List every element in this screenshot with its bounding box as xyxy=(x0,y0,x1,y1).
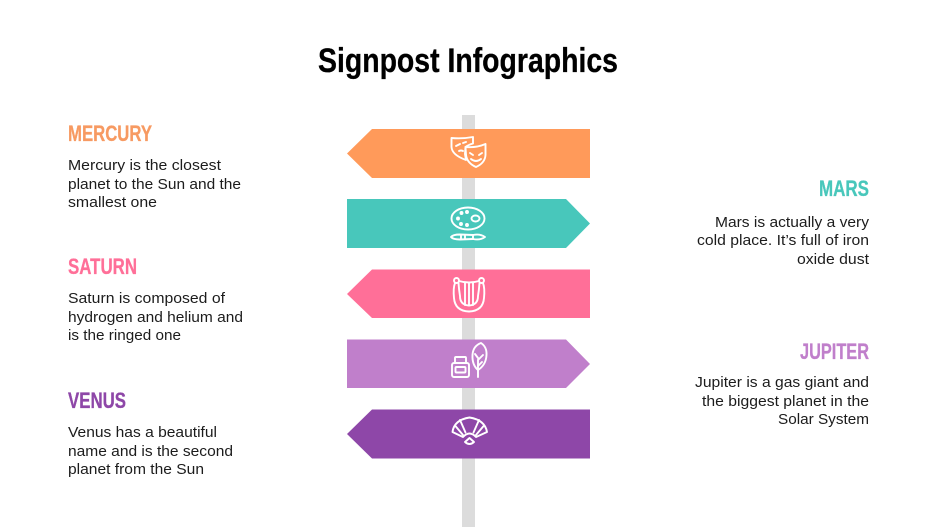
text block: Venus: name and is the second xyxy=(68,443,233,460)
text block: Jupiter: Jupiter is a gas giant and xyxy=(695,374,869,391)
icon: theatre masks xyxy=(452,137,486,167)
panel: Jupiter xyxy=(695,339,869,428)
text block: Mars xyxy=(697,214,870,268)
text block: Mars: oxide dust xyxy=(797,251,870,268)
signpost pole xyxy=(462,115,475,527)
title: Signpost Infographics xyxy=(318,42,618,80)
text block: Mercury: smallest one xyxy=(68,194,157,211)
text block: Jupiter: Solar System xyxy=(778,411,869,428)
text block: Venus: Venus has a beautiful xyxy=(68,424,217,441)
text block: Mars: cold place. It’s full of iron xyxy=(697,232,869,249)
heading: Saturn: SATURN xyxy=(68,254,137,279)
arrow: light purple, pointing right xyxy=(347,340,590,388)
heading: Jupiter: JUPITER xyxy=(800,339,869,364)
icon: lyre xyxy=(454,278,484,312)
heading: Venus: VENUS xyxy=(68,388,126,413)
heading: Mars: MARS xyxy=(819,176,869,201)
text block: Saturn: hydrogen and helium and xyxy=(68,309,243,326)
text block: Saturn: Saturn is composed of xyxy=(68,290,226,307)
text block: Saturn xyxy=(68,290,243,344)
text block: Mercury xyxy=(68,157,241,211)
text block: Jupiter xyxy=(695,374,869,428)
text block: Saturn: is the ringed one xyxy=(68,327,181,344)
arrow: pink, pointing left xyxy=(347,270,590,318)
arrow: orange, pointing left xyxy=(347,129,590,178)
icon: paint palette and brush xyxy=(451,208,485,240)
icon: ink bottle and quill xyxy=(452,343,487,377)
icon: folding fan xyxy=(452,418,487,444)
panel: Saturn xyxy=(68,254,243,344)
arrow: dark purple, pointing left xyxy=(347,410,590,458)
panel: Venus xyxy=(68,388,233,478)
text block: Venus xyxy=(68,424,233,478)
heading: Mercury: MERCURY xyxy=(68,121,152,146)
text block: Mars: Mars is actually a very xyxy=(715,214,870,231)
text block: Mercury: Mercury is the closest xyxy=(68,157,222,174)
text block: Mercury: planet to the Sun and the xyxy=(68,176,241,193)
panel: Mercury xyxy=(68,121,241,211)
text block: Venus: planet from the Sun xyxy=(68,461,204,478)
text block: Jupiter: the biggest planet in the xyxy=(702,393,869,410)
arrow: teal, pointing right xyxy=(347,199,590,248)
panel: Mars xyxy=(697,176,870,268)
